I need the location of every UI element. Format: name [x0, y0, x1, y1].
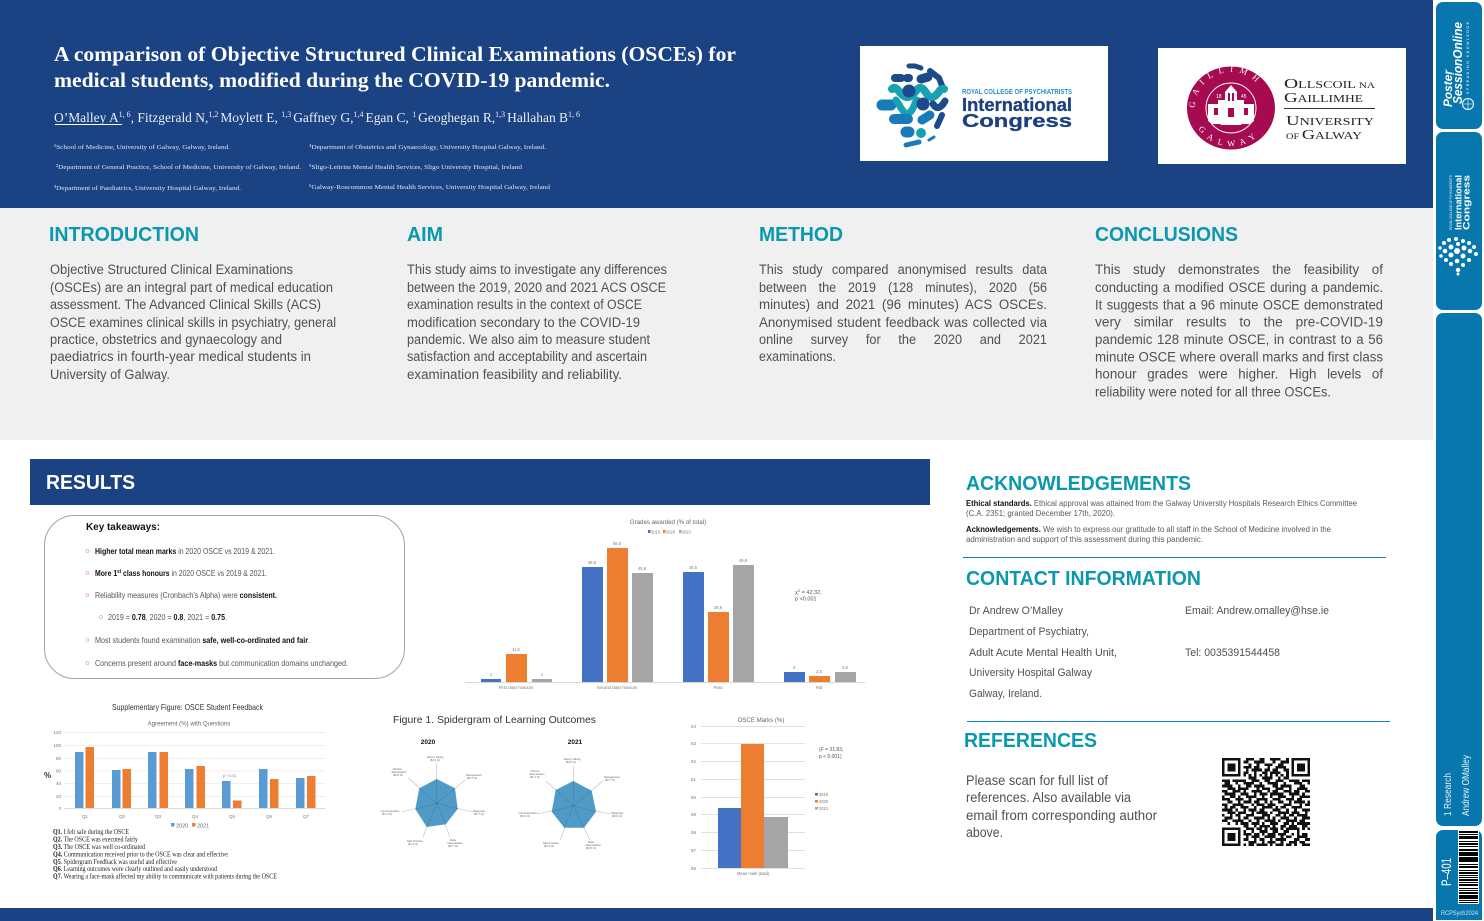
- chart: grades awarded: 46,5: [689, 565, 698, 570]
- panel: conclusions: minute OSCE where overall marks and first class: [1095, 350, 1383, 364]
- panel: conclusions: honour grades were higher. High levels of: [1095, 366, 1383, 382]
- spider chart: 2021: 2021: [568, 739, 583, 746]
- chart: OSCE marks: 61: [691, 777, 696, 782]
- panel: introduction: Objective Structured Clinical Examinations: [50, 262, 293, 277]
- panel: acknowledgements: (C.A. 2351; granted December 17th, 2020).: [966, 509, 1115, 518]
- chart legend: feedback: [171, 823, 209, 830]
- panel: contact information: University Hospital Galway: [969, 667, 1092, 679]
- barcode: [1458, 830, 1479, 904]
- panel: key takeaways: class honours: [121, 568, 170, 578]
- chart: OSCE marks: 58: [691, 830, 696, 835]
- chart: supplementary student feedback: Q5: [229, 814, 235, 819]
- spider chart: 2021: Management: [604, 775, 620, 779]
- spider chart: 2021: Examination: [530, 772, 545, 776]
- spider chart: 2020: 2020: [421, 739, 436, 746]
- panel: conclusions: [1095, 224, 1383, 400]
- logo: Royal College of Psychiatrists International Congress: [860, 46, 1108, 161]
- sidebar tab: International Congress: Congress: [1462, 175, 1472, 230]
- spider chart: 2021: Diagnosis: [611, 811, 624, 815]
- spider chart: 2020: Clinical: [393, 767, 402, 771]
- question key: [53, 829, 277, 880]
- chart: OSCE marks: [691, 717, 843, 876]
- affiliations: ¹School of Medicine, University of Galway, Galway, Ireland.: [54, 144, 230, 151]
- spider chart: 2020: Communication: [381, 809, 400, 813]
- affiliations: ⁵Sligo-Leitrim Mental Health Services, Sligo University Hospital, Ireland: [309, 164, 523, 171]
- logo: University of Galway: GALWAY: [1199, 126, 1255, 147]
- chart: OSCE marks: 62: [691, 759, 696, 764]
- panel: key takeaways: Key takeaways:: [86, 521, 160, 533]
- panel: references: references. Also available via: [966, 790, 1131, 805]
- logo: University of Galway: 18: [1216, 94, 1222, 100]
- authors: 1,3: [281, 110, 293, 119]
- authors: , Fitzgerald N,: [131, 110, 208, 125]
- sidebar tab: poster number and barcode: P–401: [1438, 858, 1454, 886]
- sidebar tab: poster number and barcode: RCPSych2024: [1441, 910, 1478, 917]
- chart: supplementary student feedback: 40: [56, 781, 61, 786]
- chart legend: marks: 2020: [819, 799, 829, 804]
- spider chart: 2020: Examination: [392, 770, 407, 774]
- question key: Q4. Communication received prior to the OSCE was clear and effective: [53, 852, 228, 858]
- authors: [54, 110, 580, 125]
- panel: conclusions: CONCLUSIONS: [1095, 224, 1238, 246]
- chart: supplementary student feedback: Q7: [303, 814, 309, 819]
- panel: key takeaways: 2019 = 0.78, 2020 = 0.8, 2021 = 0.75.: [108, 612, 227, 622]
- logo: University of Galway: OF G ALWAY: [1286, 128, 1363, 143]
- panel: contact information: Dr Andrew O’Malley: [969, 605, 1063, 617]
- spider chart: 2020: (82.7 %): [467, 776, 477, 780]
- panel: method: minutes) and 2021 (96 minutes) ACS OSCEs.: [759, 297, 1047, 312]
- chart: supplementary student feedback: Q1: [82, 814, 88, 819]
- panel: acknowledgements: ACKNOWLEDGEMENTS: [966, 473, 1191, 495]
- panel: conclusions: very similar results to the pre-COVID-19: [1095, 314, 1383, 330]
- panel: references: [964, 730, 1157, 840]
- chart: supplementary student feedback: p < 0.01: [223, 774, 236, 778]
- panel: key takeaways: Reliability measures (Cronbach’s Alpha) were consistent.: [95, 590, 277, 600]
- poster title: A comparison of Objective Structured Clinical Examinations (OSCEs) for: [54, 42, 736, 66]
- panel: method: between the 2019 (128 minutes), 2020 (56: [759, 280, 1047, 295]
- footer band: [0, 908, 1433, 921]
- chart: grades awarded: 49,9: [739, 558, 748, 563]
- poster title: [54, 42, 736, 92]
- chart legend: feedback: 2021: [197, 824, 209, 830]
- header band: [0, 0, 1433, 208]
- sidebar tab: category and author: [1436, 313, 1482, 826]
- chart: grades awarded: Fail: [816, 685, 822, 690]
- chart: supplementary student feedback: Q6: [266, 814, 272, 819]
- authors: 1,2: [208, 110, 220, 119]
- spider chart: 2020: (82.2 %): [430, 758, 440, 762]
- chart: OSCE marks: p < 0.001): [819, 754, 842, 760]
- affiliations: ²Department of General Practice, School of Medicine, University of Galway, Ireland.: [56, 164, 301, 171]
- chart legend: marks: 2019: [819, 792, 829, 797]
- logo: University of Galway: U NIVERSITY: [1286, 114, 1375, 129]
- chart: supplementary student feedback: Q2: [119, 814, 125, 819]
- logo: Royal College of Psychiatrists International Congress: ROYAL COLLEGE OF PSYCHIATRISTS: [962, 87, 1072, 96]
- chart: grades awarded: = 42.32,: [800, 590, 822, 596]
- affiliations: ³Department of Paediatrics, University Hospital Galway, Ireland.: [54, 185, 241, 192]
- authors: Egan C,: [365, 110, 412, 125]
- question key: Q7. Wearing a face-mask affected my ability to communicate with patients during the OSCE: [53, 874, 277, 880]
- panel: conclusions: This study demonstrates the feasibility of: [1095, 262, 1383, 277]
- spider chart: 2021: (82.7 %): [605, 778, 615, 782]
- panel: contact information: [966, 568, 1329, 700]
- question key: Q1. I felt safe during the OSCE: [53, 829, 129, 836]
- authors: 1,3: [495, 110, 507, 119]
- sidebar tab: Poster Session Online: SPREADING KNOWLEDGE: [1466, 21, 1470, 94]
- panel: aim: [407, 224, 667, 382]
- spider chart: 2021: (82.0 %): [566, 760, 576, 764]
- panel: aim: pandemic. We also aim to measure student: [407, 332, 650, 347]
- panel: aim: examination results in the context of OSCE: [407, 297, 642, 312]
- panel: references: Please scan for full list of: [966, 773, 1108, 788]
- affiliations: ⁶Galway-Roscommon Mental Health Services, University Hospital Galway, Ireland: [309, 184, 551, 191]
- panel: key takeaways: More 1: [95, 568, 117, 578]
- sidebar tab: poster number and barcode: [1436, 830, 1482, 920]
- chart: supplementary student feedback: 100: [53, 743, 61, 748]
- chart legend: grades: 2019: [651, 530, 661, 534]
- chart legend: grades: 2020: [666, 530, 676, 534]
- panel: introduction: (OSCEs) are an integral part of medical education: [50, 280, 333, 295]
- panel: key takeaways: Most students found examination safe, well-co-ordinated and fair.: [95, 635, 310, 645]
- chart: supplementary student feedback: 80: [56, 756, 61, 761]
- chart: supplementary student feedback: Agreement (%) with Questions: [148, 720, 230, 728]
- logo: Royal College of Psychiatrists International Congress: Congress: [962, 111, 1072, 131]
- question key: Q5. Spidergram Feedback was useful and effective: [53, 859, 177, 866]
- poster title: medical students, modified during the COVID-19 pandemic.: [54, 68, 610, 92]
- chart legend: marks: [815, 792, 829, 811]
- affiliations: ⁴Department of Obstetrics and Gynaecology, University Hospital Galway, Ireland.: [309, 144, 546, 151]
- grey summary band: [0, 208, 1433, 440]
- logo: University of Galway: GAILLIMH: [1189, 66, 1260, 108]
- figure 1: spidergrams: Figure 1. Spidergram of Learning Outcomes: [393, 714, 596, 726]
- panel: contact information: Tel: 0035391544458: [1185, 647, 1280, 659]
- sidebar tab: Poster Session Online: [1436, 2, 1482, 129]
- panel: method: examinations.: [759, 349, 836, 364]
- panel: aim: examination feasibility and reliability.: [407, 367, 622, 382]
- chart: OSCE marks: OSCE Marks (%): [738, 717, 784, 724]
- panel: method: METHOD: [759, 224, 843, 246]
- chart: grades awarded: χ: [795, 590, 798, 596]
- panel: introduction: paediatrics in fourth-year medical students in: [50, 349, 311, 364]
- chart: grades awarded: Second class honours: [597, 685, 637, 690]
- logo: Royal College of Psychiatrists International Congress: International: [962, 95, 1072, 115]
- chart legend: marks: 2021: [819, 806, 829, 811]
- affiliations: [54, 144, 551, 192]
- spider chart: 2020: Management: [466, 773, 482, 777]
- panel: key takeaways: Higher total mean marks in 2020 OSCE vs 2019 & 2021.: [95, 546, 275, 556]
- panel: method: online survey for the 2020 and 2021: [759, 332, 1047, 347]
- chart: supplementary student feedback: Supplementary Figure: OSCE Student Feedback: [112, 702, 264, 712]
- authors: 1: [412, 110, 418, 119]
- panel: key takeaways: [44, 516, 404, 678]
- chart: grades awarded: 11,5: [512, 647, 521, 652]
- spider chart: 2021: (82.5 %): [586, 846, 596, 850]
- spider chart: 2020: Safe Practice: [407, 839, 423, 843]
- authors: Geoghegan R,: [418, 110, 495, 125]
- panel: conclusions: It suggests that a 96 minute OSCE demonstrated: [1095, 298, 1383, 312]
- QR code: [1222, 759, 1310, 845]
- spider chart: 2021: (82.9 %): [612, 814, 622, 818]
- chart: supplementary student feedback: Q3: [155, 814, 161, 819]
- figure 1: spidergrams: [381, 714, 624, 850]
- panel: key takeaways: st: [117, 569, 121, 575]
- sidebar tab: Poster Session Online: Poster: [1441, 69, 1455, 107]
- chart: grades awarded: 3,9: [842, 665, 849, 670]
- panel: contact information: Galway, Ireland.: [969, 688, 1042, 700]
- panel: references: REFERENCES: [964, 730, 1097, 752]
- spider chart: 2021: Clinical: [531, 769, 540, 773]
- spider chart: 2021: History Taking: [564, 757, 581, 761]
- question key: Q2. The OSCE was executed fairly: [53, 836, 139, 844]
- chart: grades awarded: First class honours: [499, 685, 533, 690]
- sidebar tab: category and author: Andrew OMalley: [1460, 754, 1472, 816]
- panel: aim: This study aims to investigate any differences: [407, 262, 667, 277]
- spider chart: 2021: (81.1 %): [530, 775, 540, 779]
- panel: method: [759, 224, 1047, 364]
- spider chart: 2021: [519, 739, 624, 850]
- authors: Hallahan B: [507, 110, 568, 125]
- sidebar tab: Poster Session Online: SessionOnline: [1450, 22, 1465, 104]
- panel: introduction: [49, 224, 336, 382]
- panel: contact information: Adult Acute Mental Health Unit,: [969, 647, 1117, 659]
- spider chart: 2020: [381, 739, 486, 848]
- panel: aim: satisfaction and acceptability and ascertain: [407, 349, 647, 364]
- spider chart: 2020: Interpretation: [447, 841, 463, 845]
- chart: grades awarded: 29,5: [714, 605, 723, 610]
- chart: OSCE marks: 57: [691, 848, 696, 853]
- authors: 1, 6: [568, 110, 580, 119]
- sidebar tab: International Congress: ROYAL COLLEGE OF PSYCHIATRISTS: [1449, 174, 1453, 230]
- spider chart: 2021: (81.9 %): [520, 814, 530, 818]
- chart: supplementary student feedback: 20: [56, 794, 61, 799]
- chart: grades awarded: 2,5: [816, 669, 823, 674]
- sidebar tab: International Congress: International: [1454, 175, 1464, 230]
- chart: grades awarded: 1: [541, 672, 544, 677]
- spider chart: 2020: History Taking: [427, 755, 444, 759]
- panel: acknowledgements: Acknowledgements. We wish to express our gratitude to all staff in the School of Medicine involved in the: [966, 525, 1332, 534]
- panel: method: Anonymised student feedback was collected via: [759, 315, 1047, 330]
- panel: contact information: CONTACT INFORMATION: [966, 568, 1201, 590]
- logo: University of Galway: G AILLIMHE: [1284, 91, 1363, 106]
- spider chart: 2020: Diagnosis: [473, 809, 486, 813]
- panel: acknowledgements: Ethical standards. Ethical approval was attained from the Galway University Hospitals Research Ethics Committee: [966, 499, 1358, 508]
- panel: conclusions: pandemic 128 minute OSCE, in contrast to a 56: [1095, 332, 1383, 347]
- panel: contact information: Email: Andrew.omalley@hse.ie: [1185, 605, 1329, 617]
- panel: key takeaways: Concerns present around face-masks but communication domains unchanged.: [95, 658, 348, 668]
- chart: grades awarded: 56,5: [613, 541, 622, 546]
- chart: supplementary student feedback: 120: [53, 730, 61, 735]
- sidebar tab: International Congress: [1436, 132, 1482, 310]
- authors: 1, 6: [119, 110, 131, 119]
- chart: supplementary student feedback: Q4: [192, 814, 198, 819]
- spider chart: 2020: Data: [450, 838, 456, 842]
- chart: grades awarded: 48,5: [588, 560, 597, 565]
- chart legend: grades: 2021: [682, 530, 692, 534]
- authors: 1,4: [354, 110, 365, 119]
- spider chart: 2020: (81.1 %): [382, 812, 392, 816]
- spider chart: 2021: Data: [588, 840, 594, 844]
- chart: supplementary student feedback: 0: [58, 806, 61, 811]
- chart: OSCE marks: 60: [691, 795, 696, 800]
- spider chart: 2020: (82.8 %): [393, 773, 403, 777]
- logo: University of Galway: [1158, 48, 1406, 164]
- chart: OSCE marks: 56: [691, 866, 696, 871]
- chart: OSCE marks: 63: [691, 741, 696, 746]
- panel: introduction: assessment. The Advanced Clinical Skills (ACS): [50, 297, 321, 312]
- panel: conclusions: conducting a modified OSCE during a pandemic.: [1095, 280, 1383, 295]
- panel: introduction: INTRODUCTION: [49, 224, 199, 246]
- panel: introduction: OSCE examines clinical skills in psychiatry, general: [50, 315, 336, 330]
- panel: aim: modification secondary to the COVID-19: [407, 315, 640, 330]
- panel: key takeaways: in 2020 OSCE vs 2019 & 2021.: [172, 568, 288, 578]
- spider chart: 2021: Communication: [519, 811, 538, 815]
- chart: OSCE marks: 59: [691, 812, 696, 817]
- spider chart: 2021: Interpretation: [585, 843, 601, 847]
- chart: supplementary student feedback: %: [44, 771, 51, 780]
- question key: Q3. The OSCE was well co-ordinated: [53, 844, 146, 851]
- chart: supplementary student feedback: 60: [56, 768, 61, 774]
- chart: grades awarded: 45,9: [638, 566, 647, 571]
- chart: grades awarded: 1: [490, 672, 493, 677]
- panel: introduction: practice, obstetrics and gynaecology and: [50, 332, 282, 347]
- spider chart: 2020: (82.7 %): [448, 844, 458, 848]
- panel: conclusions: reliability were noted for all three OSCEs.: [1095, 384, 1331, 400]
- chart: OSCE marks: Mean mark (total): [737, 871, 770, 876]
- results heading bar: [30, 459, 930, 505]
- logo: University of Galway: O LLSCOIL NA: [1284, 77, 1375, 92]
- panel: introduction: University of Galway.: [50, 367, 170, 382]
- spider chart: 2021: Safe Practice: [543, 841, 559, 845]
- chart: grades awarded: [465, 519, 865, 690]
- authors: Gaffney G,: [293, 110, 354, 125]
- chart: supplementary student feedback: [44, 702, 325, 880]
- question key: Q6. Learning outcomes were clearly outlined and easily understood: [53, 866, 218, 873]
- spider chart: 2020: (82.7 %): [474, 812, 484, 816]
- panel: aim: between the 2019, 2020 and 2021 ACS OSCE: [407, 280, 666, 295]
- results heading bar: RESULTS: [46, 472, 135, 494]
- panel: references: above.: [966, 825, 1003, 840]
- panel: acknowledgements: administration and support of this assessment during this pandemic.: [966, 535, 1203, 544]
- spider chart: 2020: (81.1 %): [408, 842, 418, 846]
- panel: acknowledgements: [966, 473, 1358, 544]
- chart: grades awarded: 2: [798, 588, 801, 593]
- logo: University of Galway: 45: [1241, 94, 1247, 100]
- chart: OSCE marks: (F = 31.83,: [819, 747, 843, 753]
- chart: grades awarded: 4: [793, 665, 796, 670]
- authors: O’Malley A: [54, 110, 119, 125]
- spider chart: 2021: (81.9 %): [544, 844, 554, 848]
- chart legend: grades: [648, 530, 692, 534]
- panel: method: This study compared anonymised results data: [759, 262, 1047, 277]
- authors: Moylett E,: [220, 110, 281, 125]
- chart: grades awarded: Pass: [713, 685, 723, 690]
- panel: references: email from corresponding author: [966, 808, 1157, 823]
- chart: grades awarded: p <0.001: [795, 596, 817, 602]
- chart legend: feedback: 2020: [176, 824, 188, 830]
- chart: OSCE marks: 64: [691, 724, 696, 729]
- sidebar tab: category and author: 1 Research: [1442, 773, 1454, 816]
- chart: grades awarded: Grades awarded (% of total): [630, 519, 706, 526]
- panel: contact information: Department of Psychiatry,: [969, 626, 1089, 638]
- panel: aim: AIM: [407, 224, 443, 246]
